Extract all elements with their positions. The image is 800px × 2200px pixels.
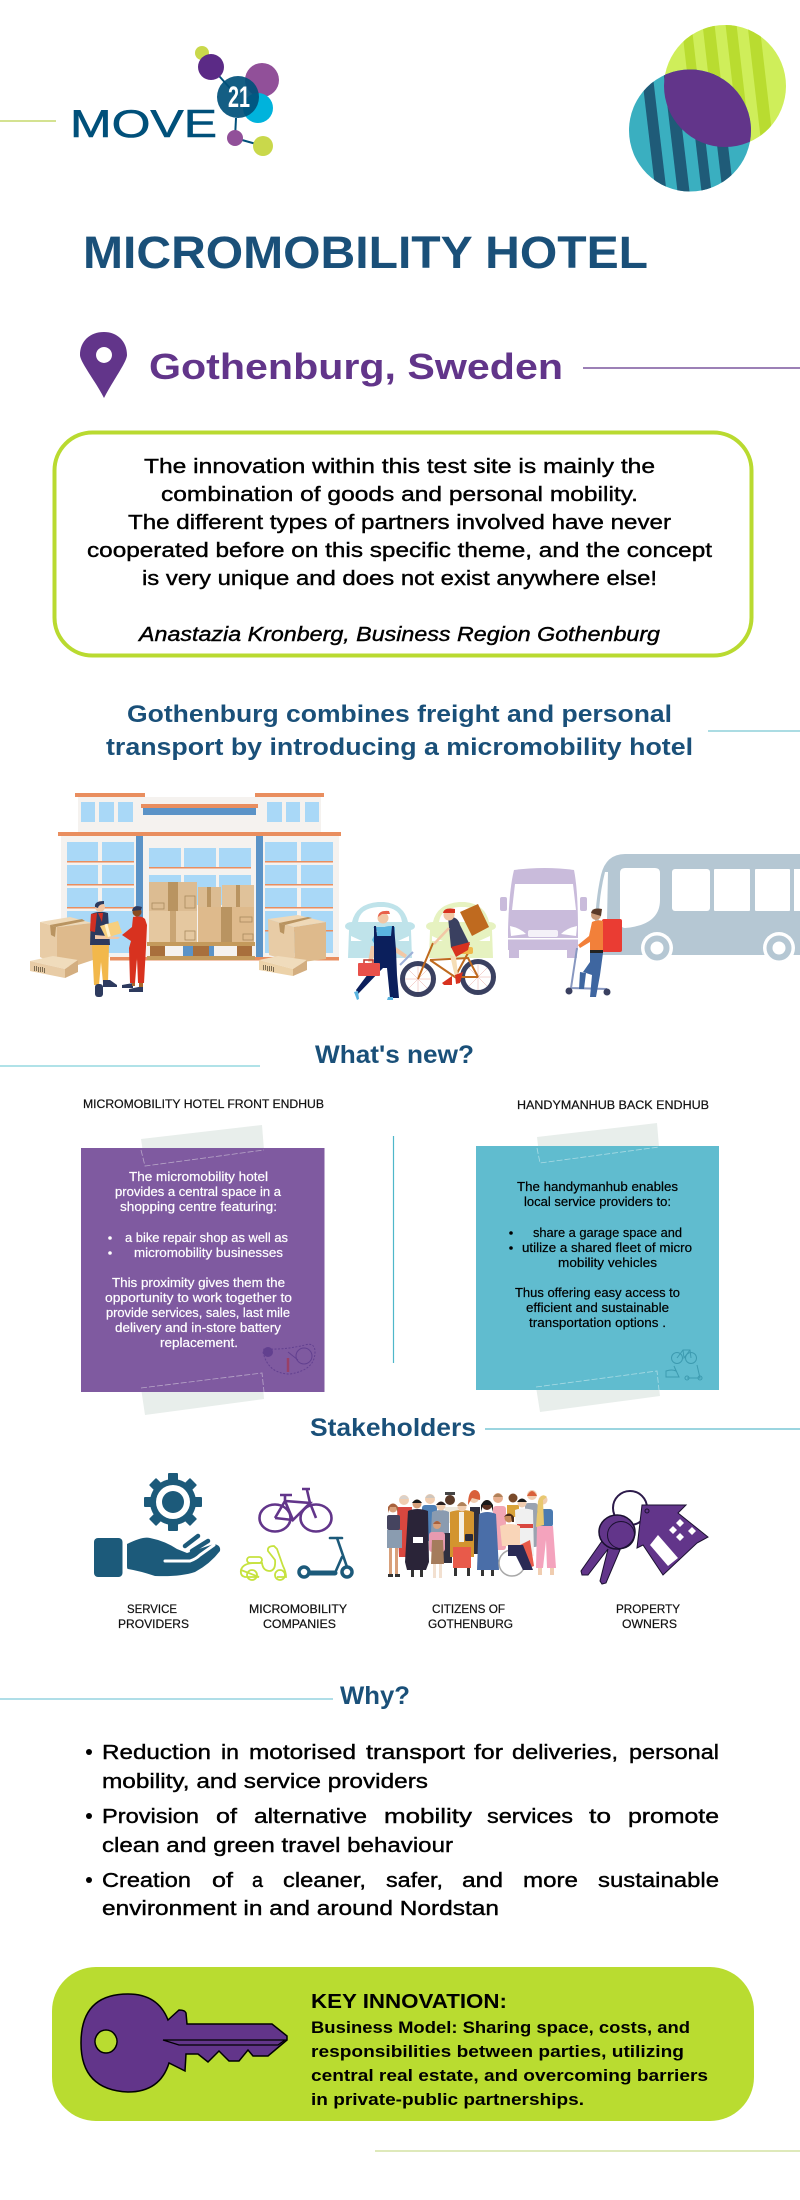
bullet list: reasons: Provision	[102, 1805, 199, 1828]
illustration: hotel building, vehicles and people	[30, 793, 800, 1000]
section heading: Why: Why?	[340, 1682, 410, 1710]
panel: micromobility hotel front end hub: delivery and in-store battery	[115, 1321, 282, 1335]
panel: micromobility hotel front end hub	[81, 1099, 324, 1415]
quote panel: The different types of partners involved have never	[128, 511, 671, 534]
panel: micromobility hotel front end hub: replacement.	[160, 1336, 238, 1350]
panel: handymanhub back end hub: transportation options .	[529, 1316, 666, 1330]
stakeholder: property owners: PROPERTY	[616, 1604, 680, 1616]
icon: bicycle	[260, 1489, 332, 1532]
quote panel: is very unique and does not exist anywhere else!	[142, 567, 657, 590]
section heading: What's new: What's new?	[315, 1041, 474, 1069]
icon: faint vehicles	[666, 1350, 702, 1380]
stakeholder: property owners	[581, 1491, 708, 1631]
panel: handymanhub back end hub: HANDYMANHUB BACK ENDHUB	[517, 1100, 709, 1112]
icon: faint repair badge	[263, 1344, 315, 1374]
handyman with toolbox	[354, 911, 413, 1000]
panel: handymanhub back end hub: local service providers to:	[524, 1195, 671, 1209]
stakeholder: service providers: SERVICE	[127, 1604, 177, 1616]
panel: micromobility hotel front end hub: This proximity gives them the	[112, 1276, 285, 1290]
panel: key innovation: central real estate, and overcoming barriers	[311, 2067, 708, 2085]
bullet list: reasons: in	[221, 1741, 239, 1764]
panel: handymanhub back end hub: utilize a shared fleet of micro	[522, 1241, 692, 1255]
quote panel	[54, 432, 752, 656]
location heading: Gothenburg, Sweden	[149, 346, 563, 387]
decorative overlapping ellipses	[629, 20, 786, 200]
stakeholder: citizens of Gothenburg	[387, 1490, 556, 1631]
panel: handymanhub back end hub: The handymanhub enables	[517, 1180, 678, 1194]
stacked boxes left and right	[30, 915, 326, 978]
bullet list: reasons: of	[216, 1805, 237, 1828]
stakeholder: micromobility companies: MICROMOBILITY	[249, 1604, 347, 1616]
bullet list: reasons: mobility, and service providers	[102, 1770, 428, 1793]
bullet list: reasons: and	[462, 1869, 503, 1892]
panel: handymanhub back end hub: mobility vehicles	[558, 1256, 657, 1270]
bullet list: reasons: personal	[629, 1741, 719, 1764]
stakeholder: service providers: PROVIDERS	[118, 1619, 189, 1631]
parked cars	[345, 902, 496, 958]
bullet list: reasons: deliveries,	[512, 1741, 618, 1764]
panel: handymanhub back end hub	[476, 1100, 719, 1412]
bullet list: reasons: promote	[628, 1805, 719, 1828]
quote panel: combination of goods and personal mobility.	[161, 483, 638, 506]
bullet list: reasons: a	[252, 1869, 264, 1892]
bullet list: reasons: safer,	[386, 1869, 443, 1892]
panel: micromobility hotel front end hub: micromobility businesses	[134, 1246, 283, 1260]
panel: micromobility hotel front end hub: a bike repair shop as well as	[125, 1231, 288, 1245]
logo: Move21: MOVE	[70, 103, 217, 146]
panel: micromobility hotel front end hub: shopping centre featuring:	[120, 1200, 277, 1214]
panel: handymanhub back end hub: Thus offering easy access to	[515, 1286, 680, 1300]
bullet list: reasons: to	[589, 1805, 611, 1828]
stakeholder: citizens of Gothenburg: CITIZENS OF	[432, 1604, 505, 1616]
bullet list: reasons: sustainable	[598, 1869, 719, 1892]
bullet list: reasons: Reduction	[102, 1741, 211, 1764]
panel: micromobility hotel front end hub: opportunity to work together to	[105, 1291, 292, 1305]
panel: handymanhub back end hub: efficient and sustainable	[526, 1301, 669, 1315]
icon: moped	[241, 1546, 286, 1580]
panel: micromobility hotel front end hub: MICROMOBILITY HOTEL FRONT ENDHUB	[83, 1099, 324, 1111]
icon: gear over open hand	[94, 1473, 220, 1577]
section heading: freight and personal transport: transport by introducing a micromobility hotel	[106, 734, 693, 761]
panel: key innovation: KEY INNOVATION:	[311, 1990, 507, 2013]
icon: kick scooter	[299, 1538, 352, 1577]
panel: micromobility hotel front end hub: provide services, sales, last mile	[106, 1306, 290, 1320]
stakeholder: citizens of Gothenburg: GOTHENBURG	[428, 1619, 513, 1631]
person on kick scooter	[566, 908, 622, 997]
bullet list: reasons: transport	[366, 1741, 465, 1764]
bullet list: reasons: for	[474, 1741, 503, 1764]
cyclist with parcel	[402, 904, 494, 994]
bullet list: reasons: motorised	[249, 1741, 356, 1764]
building	[58, 793, 341, 960]
bullet list: reasons: more	[523, 1869, 578, 1892]
panel: key innovation	[52, 1967, 754, 2121]
panel: micromobility hotel front end hub: provides a central space in a	[115, 1185, 281, 1199]
bullet list: reasons: alternative	[254, 1805, 367, 1828]
panel: handymanhub back end hub: share a garage space and	[533, 1226, 682, 1240]
panel: key innovation: Business Model: Sharing space, costs, and	[311, 2019, 690, 2037]
panel: key innovation: responsibilities between parties, utilizing	[311, 2043, 684, 2061]
stakeholder: micromobility companies	[241, 1489, 352, 1631]
bullet list: reasons	[86, 1741, 719, 1920]
bullet list: reasons: mobility	[384, 1805, 473, 1828]
bullet list: reasons: clean and green travel behaviour	[102, 1834, 453, 1857]
panel: micromobility hotel front end hub: The micromobility hotel	[129, 1170, 268, 1184]
icon: crowd of citizens	[387, 1490, 556, 1578]
bullet list: reasons: environment in and around Nordstan	[102, 1897, 499, 1920]
van	[500, 868, 587, 958]
icon: key	[81, 1994, 287, 2092]
stakeholder: micromobility companies: COMPANIES	[263, 1619, 336, 1631]
stakeholder: property owners: OWNERS	[622, 1619, 677, 1631]
section heading: freight and personal transport	[106, 701, 693, 761]
quote panel: Anastazia Kronberg, Business Region Gothenburg	[137, 623, 661, 646]
section heading: Stakeholders: Stakeholders	[310, 1414, 476, 1442]
icon: keys with house tag	[581, 1491, 708, 1584]
section heading: freight and personal transport: Gothenburg combines freight and personal	[127, 701, 672, 728]
quote panel: cooperated before on this specific theme, and the concept	[87, 539, 712, 562]
logo: Move21: 21	[228, 81, 250, 114]
boxes on pallet	[147, 882, 255, 960]
bullet list: reasons: cleaner,	[283, 1869, 366, 1892]
logo: Move21	[70, 46, 279, 156]
bus	[594, 854, 800, 964]
two people exchanging parcel	[90, 901, 147, 997]
bullet list: reasons: of	[212, 1869, 233, 1892]
title: MICROMOBILITY HOTEL	[83, 227, 648, 278]
stakeholder: service providers	[94, 1473, 220, 1631]
bullet list: reasons: Creation	[102, 1869, 191, 1892]
quote panel: The innovation within this test site is mainly the	[144, 455, 655, 478]
bullet list: reasons: services	[487, 1805, 573, 1828]
location pin icon	[80, 332, 127, 398]
panel: key innovation: in private-public partnerships.	[311, 2091, 584, 2109]
